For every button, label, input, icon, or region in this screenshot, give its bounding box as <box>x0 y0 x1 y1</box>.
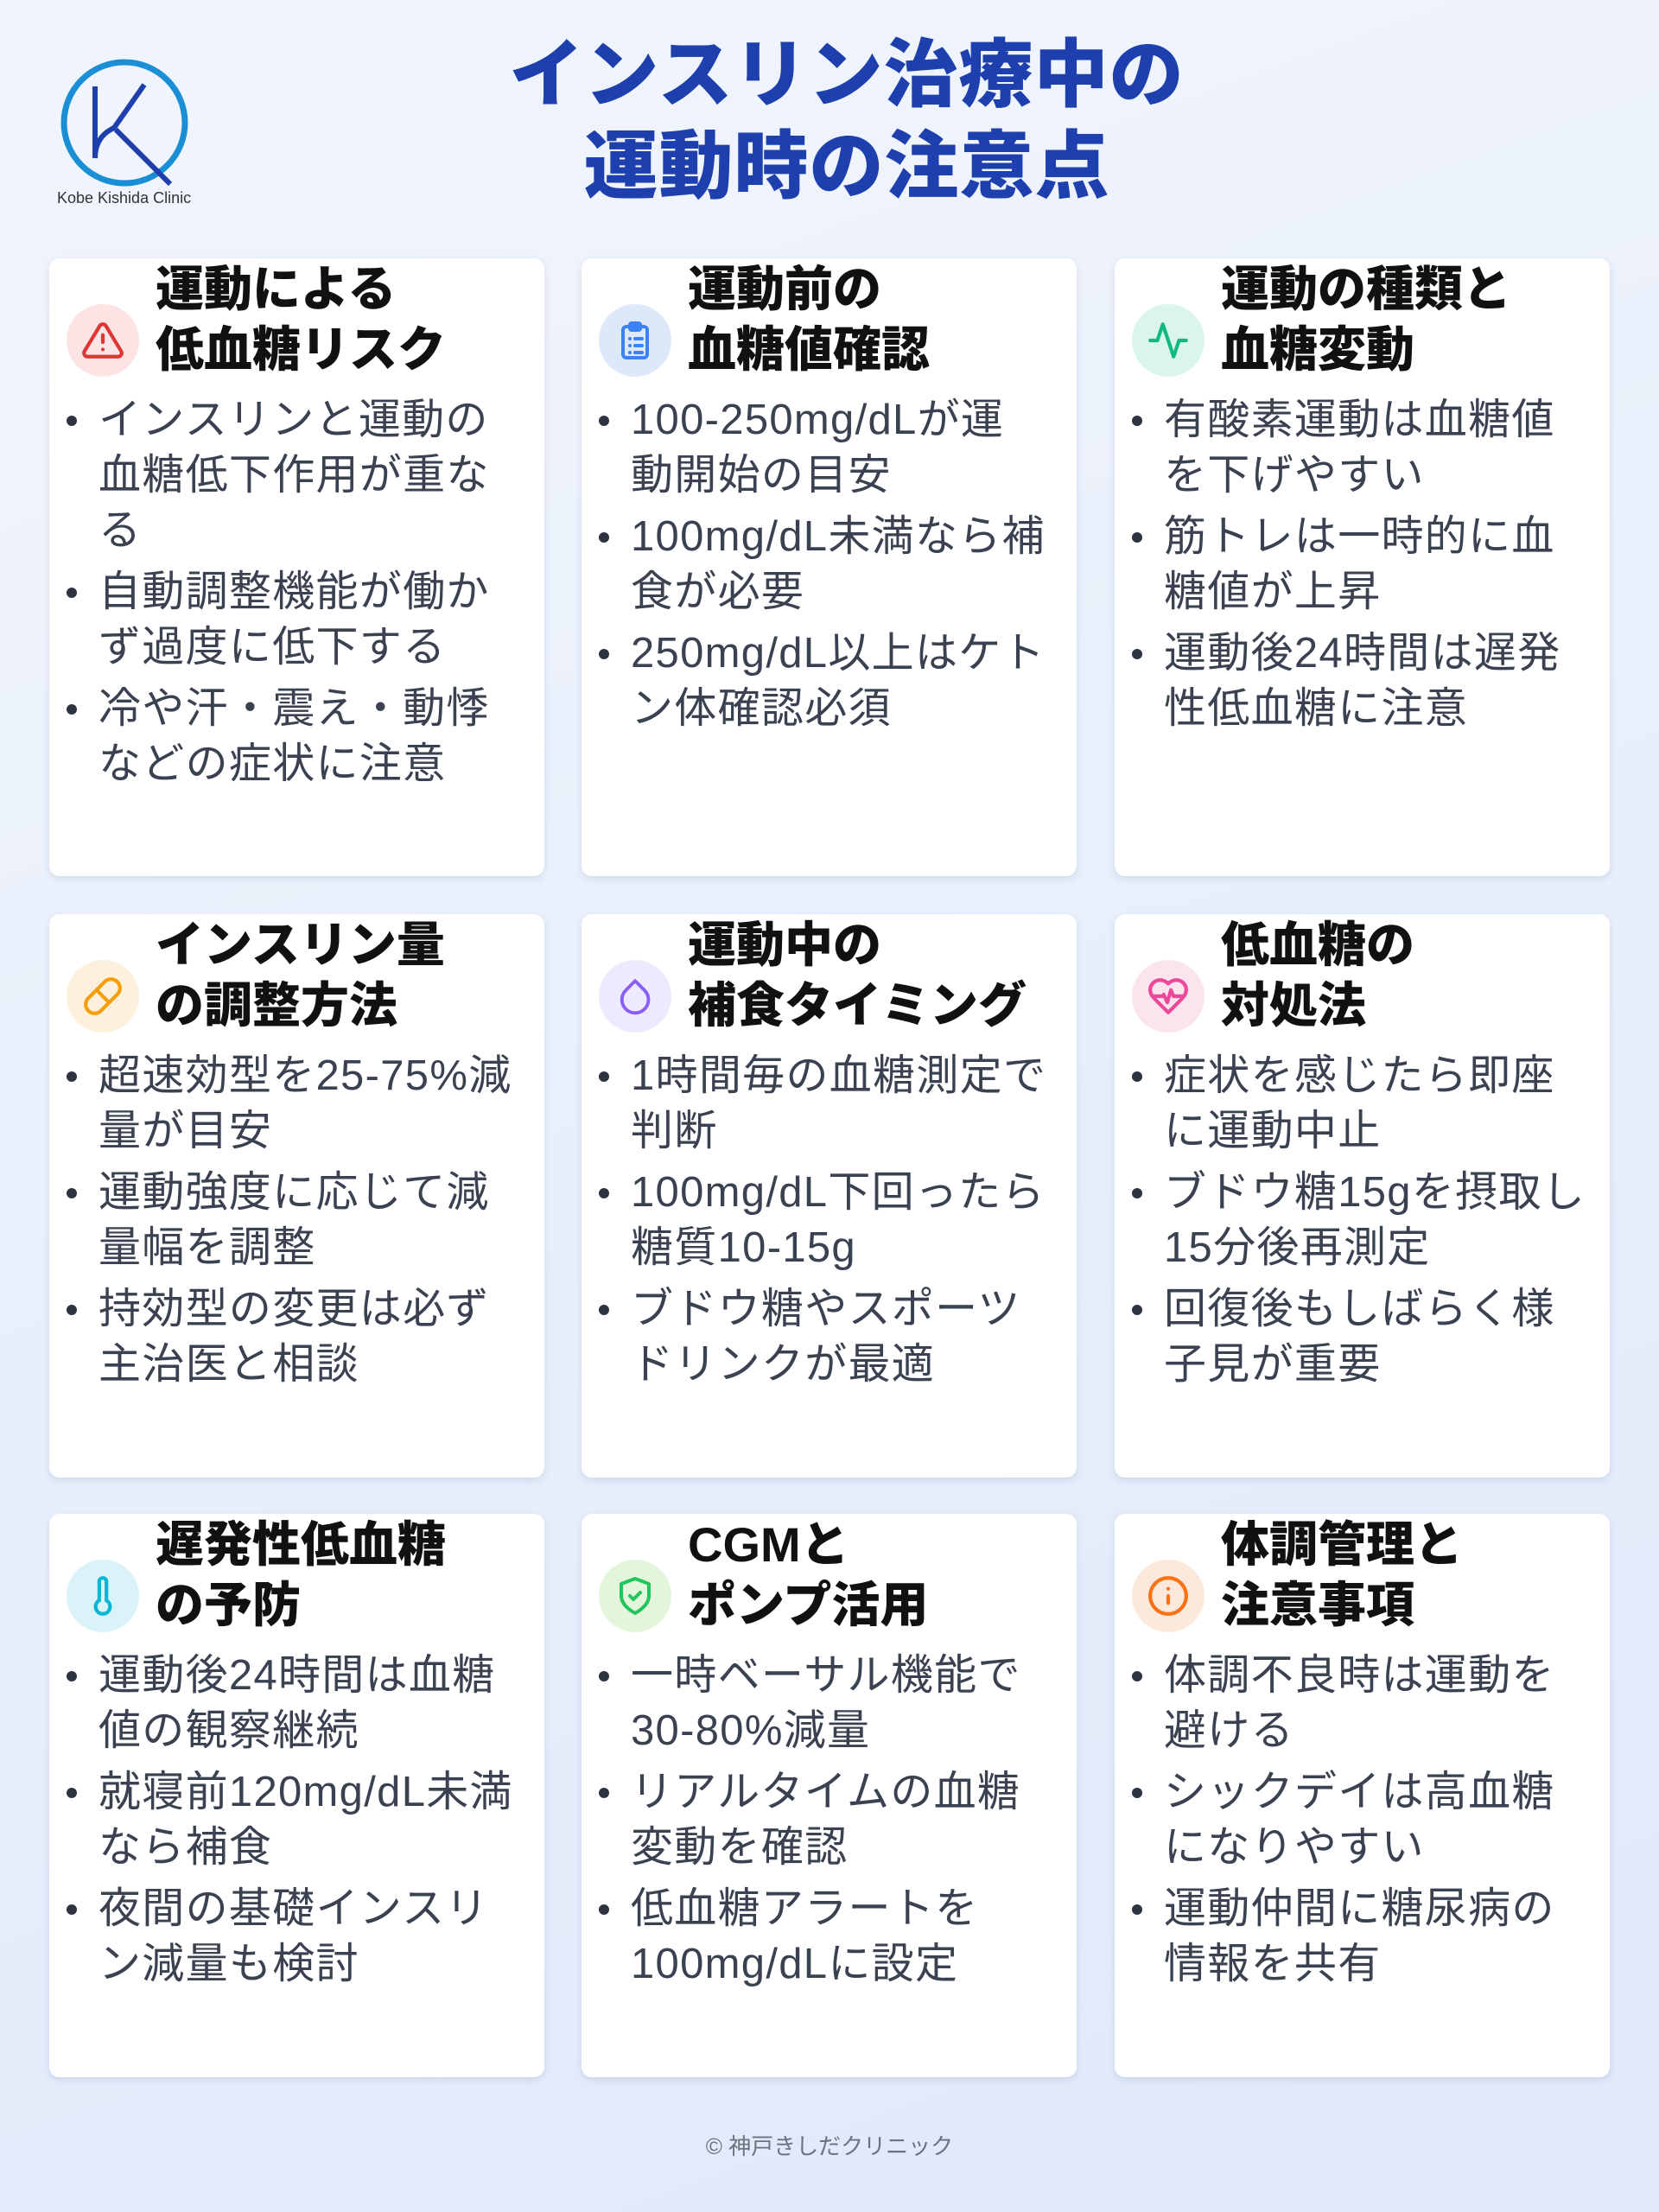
bullets: 100mg/dL下回ったら <box>631 1169 1046 1216</box>
heading: 運動による <box>156 262 396 316</box>
icon: clipboard <box>599 304 671 377</box>
heading: の予防 <box>156 1578 301 1632</box>
bullets: 情報を共有 <box>1164 1941 1382 1987</box>
title: インスリン治療中の <box>509 34 1185 117</box>
bullets: 15分後再測定 <box>1164 1224 1431 1271</box>
icon: activity <box>1132 304 1205 377</box>
bullets: になりやすい <box>1164 1824 1425 1871</box>
bullets: なら補食 <box>99 1824 272 1871</box>
bullets: 自動調整機能が働か <box>99 569 490 615</box>
bullets: 血糖低下作用が重な <box>99 452 490 499</box>
heading <box>156 262 446 377</box>
panel: hypo response <box>1115 914 1610 1478</box>
bullets: 量幅を調整 <box>99 1224 316 1271</box>
bullets: 糖値が上昇 <box>1164 569 1382 615</box>
heading <box>688 1517 928 1632</box>
bullets: 超速効型を25-75%減 <box>99 1052 512 1099</box>
heading: 低血糖の <box>1221 918 1414 972</box>
bullets <box>599 1052 1046 1388</box>
icon: droplet <box>599 960 671 1033</box>
heading: 注意事項 <box>1221 1578 1414 1632</box>
bullets: 判断 <box>631 1108 718 1154</box>
heading: 補食タイミング <box>688 978 1027 1033</box>
heading: インスリン量 <box>156 918 445 972</box>
bullets: 動開始の目安 <box>631 452 892 499</box>
bullets: 100-250mg/dLが運 <box>631 397 1004 443</box>
bullets <box>599 397 1046 732</box>
bullets: 就寝前120mg/dL未満 <box>99 1769 513 1815</box>
bullets: 主治医と相談 <box>99 1341 359 1388</box>
bullets: リアルタイムの血糖 <box>631 1769 1020 1815</box>
bullets: 量が目安 <box>99 1108 272 1154</box>
bullets: 有酸素運動は血糖値 <box>1164 397 1555 443</box>
bullets: 運動後24時間は遅発 <box>1164 630 1561 677</box>
bullets <box>1132 1052 1586 1388</box>
panel: CGM pump <box>582 1514 1077 2077</box>
heading: 遅発性低血糖 <box>156 1517 446 1572</box>
bullets: ブドウ糖15gを摂取し <box>1164 1169 1586 1216</box>
bullets: 値の観察継続 <box>99 1707 359 1754</box>
icon: info <box>1132 1560 1205 1632</box>
logo <box>57 59 191 207</box>
bullets: ドリンクが最適 <box>631 1341 935 1388</box>
bullets: 夜間の基礎インスリ <box>99 1885 489 1932</box>
bullets: 症状を感じたら即座 <box>1164 1052 1555 1099</box>
bullets: 運動後24時間は血糖 <box>99 1652 496 1699</box>
bullets: 避ける <box>1164 1707 1294 1754</box>
icon: heart pulse <box>1132 960 1205 1033</box>
panel: snack timing <box>582 914 1077 1478</box>
bullets <box>1132 397 1561 732</box>
heading <box>1221 262 1511 377</box>
logo: Kobe Kishida Clinic <box>57 189 191 207</box>
panel: health management <box>1115 1514 1610 2077</box>
heading <box>688 262 930 377</box>
heading <box>156 1517 446 1632</box>
bullets: 1時間毎の血糖測定で <box>631 1052 1046 1099</box>
heading <box>1221 918 1414 1033</box>
heading: 体調管理と <box>1221 1517 1463 1572</box>
heading: 低血糖リスク <box>156 322 446 377</box>
icon: thermometer <box>67 1560 139 1632</box>
bullets: 性低血糖に注意 <box>1164 685 1468 732</box>
bullets: 100mg/dLに設定 <box>631 1941 958 1987</box>
bullets: シックデイは高血糖 <box>1164 1769 1555 1815</box>
heading: 運動の種類と <box>1221 262 1511 316</box>
bullets: ず過度に低下する <box>99 624 446 671</box>
bullets: ブドウ糖やスポーツ <box>631 1286 1021 1332</box>
title: 運動時の注意点 <box>584 125 1109 208</box>
bullets <box>67 397 490 787</box>
icon: warning <box>67 304 139 377</box>
bullets: 持効型の変更は必ず <box>99 1286 490 1332</box>
bullets: 食が必要 <box>631 569 804 615</box>
heading: 血糖変動 <box>1221 322 1414 377</box>
bullets: 250mg/dL以上はケト <box>631 630 1046 677</box>
bullets: 体調不良時は運動を <box>1164 1652 1555 1699</box>
heading: CGMと <box>688 1517 849 1572</box>
panel: delayed hypo <box>49 1514 544 2077</box>
bullets <box>67 1652 513 1987</box>
bullets: インスリンと運動の <box>99 397 489 443</box>
bullets: 運動強度に応じて減 <box>99 1169 490 1216</box>
bullets <box>1132 1652 1555 1987</box>
bullets: などの症状に注意 <box>99 741 446 787</box>
panel: check before <box>582 258 1077 876</box>
bullets: ン減量も検討 <box>99 1941 359 1987</box>
heading <box>156 918 445 1033</box>
bullets <box>599 1652 1021 1987</box>
bullets: 子見が重要 <box>1164 1341 1382 1388</box>
heading <box>688 918 1027 1033</box>
icon: shield <box>599 1560 671 1632</box>
bullets: 糖質10-15g <box>631 1224 856 1271</box>
bullets: 30-80%減量 <box>631 1707 870 1754</box>
bullets: 一時ベーサル機能で <box>631 1652 1021 1699</box>
title <box>509 34 1185 208</box>
bullets: 回復後もしばらく様 <box>1164 1286 1555 1332</box>
bullets: 100mg/dL未満なら補 <box>631 513 1046 560</box>
bullets: 低血糖アラートを <box>631 1885 978 1932</box>
footer: © 神戸きしだクリニック <box>706 2133 953 2159</box>
bullets: る <box>99 507 142 554</box>
heading: の調整方法 <box>156 978 397 1033</box>
heading: 運動中の <box>688 918 881 972</box>
bullets: に運動中止 <box>1164 1108 1382 1154</box>
heading: ポンプ活用 <box>688 1578 928 1632</box>
bullets <box>67 1052 512 1388</box>
icon: pill <box>67 960 139 1033</box>
panel: insulin adjust <box>49 914 544 1478</box>
bullets: 運動仲間に糖尿病の <box>1164 1885 1555 1932</box>
bullets: 変動を確認 <box>631 1824 849 1871</box>
heading: 運動前の <box>688 262 881 316</box>
heading: 対処法 <box>1221 978 1366 1033</box>
heading <box>1221 1517 1463 1632</box>
bullets: ン体確認必須 <box>631 685 892 732</box>
heading: 血糖値確認 <box>688 322 930 377</box>
bullets: 筋トレは一時的に血 <box>1164 513 1555 560</box>
bullets: を下げやすい <box>1164 452 1425 499</box>
panel: risk <box>49 258 544 876</box>
panel: exercise type <box>1115 258 1610 876</box>
bullets: 冷や汗・震え・動悸 <box>99 685 490 732</box>
